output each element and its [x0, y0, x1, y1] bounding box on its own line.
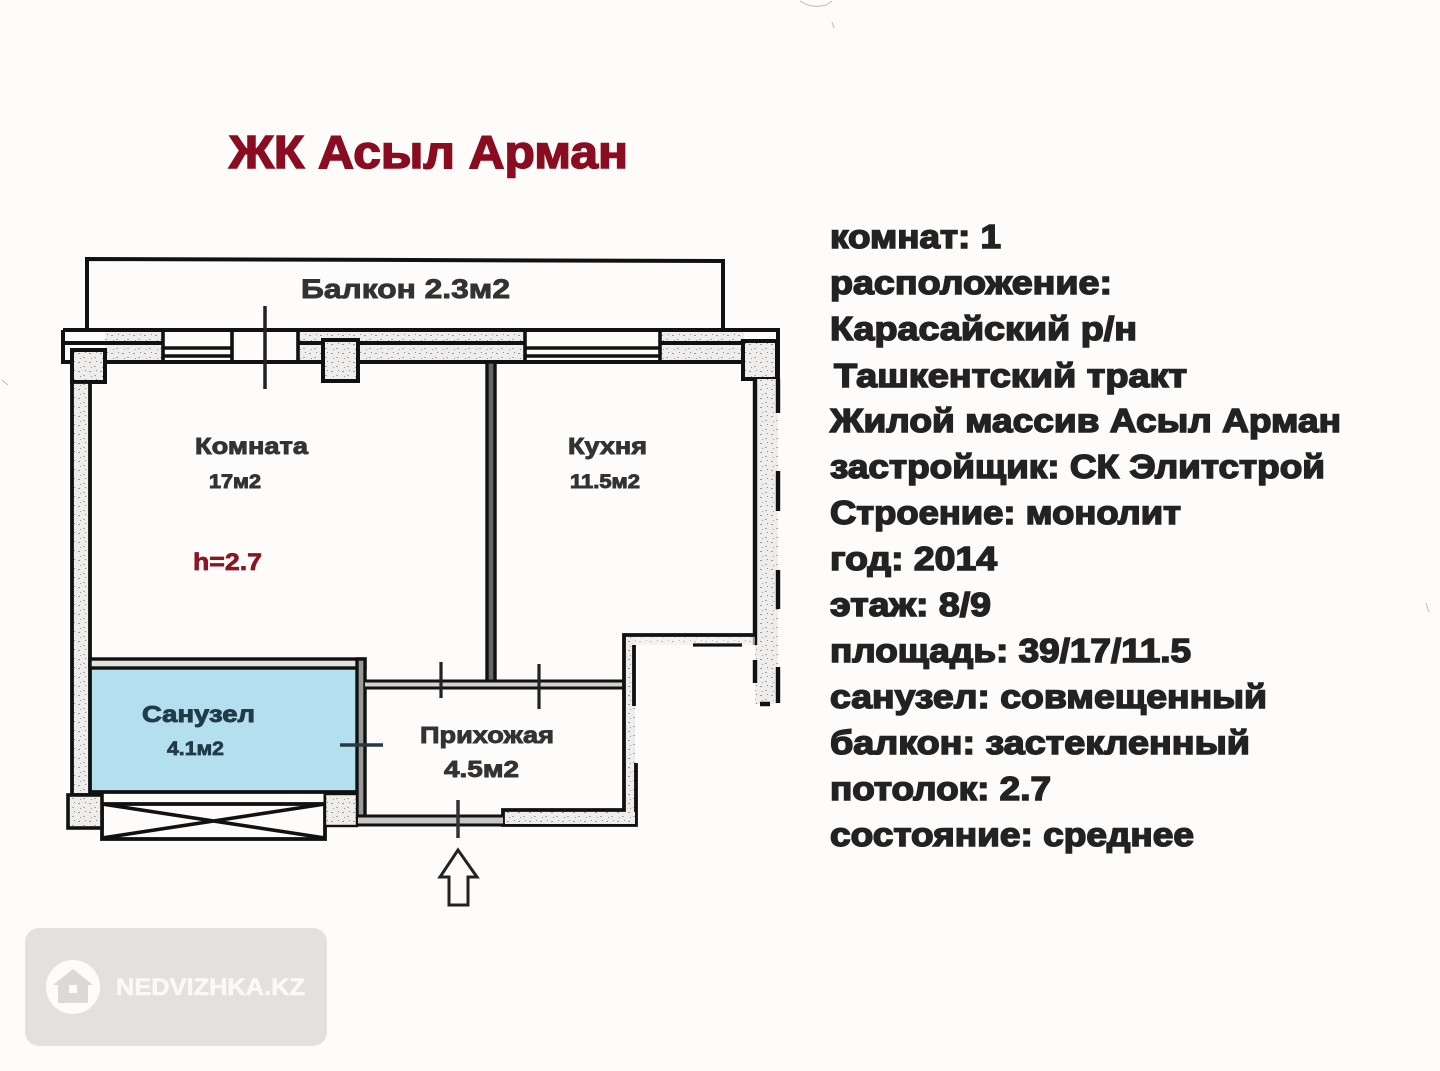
lower left column	[68, 795, 102, 828]
watermark text: NEDVIZHKA.KZ	[116, 974, 305, 1001]
arrow: entrance	[440, 850, 477, 905]
apartment details text block: расположение:	[830, 264, 1112, 301]
apartment details text block: год: 2014	[830, 540, 998, 577]
label: bathroom: Санузел	[142, 701, 255, 727]
lower right column	[325, 794, 357, 826]
room: bathroom fill	[91, 668, 357, 791]
apartment details text block: балкон: застекленный	[830, 724, 1250, 761]
title: ЖК Асыл Арман	[228, 126, 628, 178]
watermark badge	[25, 928, 327, 1046]
apartment details text block	[829, 218, 1341, 853]
label: ceiling height: h=2.7	[193, 549, 262, 576]
label: kitchen: Кухня	[568, 433, 647, 459]
floor plan	[63, 259, 778, 905]
label: hall area: 4.5м2	[444, 756, 519, 782]
left corner column	[72, 350, 105, 382]
middle column	[323, 340, 358, 381]
hall right wall and recess	[503, 635, 755, 825]
hall bottom wall with door	[358, 800, 503, 838]
top exterior wall	[63, 330, 778, 413]
partition between room and kitchen	[487, 362, 495, 682]
left wall	[72, 382, 90, 795]
apartment details text block: Карасайский р/н	[830, 310, 1137, 347]
apartment details text block: Ташкентский тракт	[834, 357, 1187, 394]
apartment details text block: Жилой массив Асыл Арман	[829, 402, 1341, 439]
window and door marks	[263, 306, 267, 389]
apartment details text block: состояние: среднее	[830, 816, 1194, 853]
label: room area: 17м2	[209, 472, 261, 493]
apartment details text block: Строение: монолит	[830, 494, 1181, 531]
apartment details text block: потолок: 2.7	[830, 770, 1051, 807]
right corner column	[743, 341, 777, 379]
apartment details text block: площадь: 39/17/11.5	[830, 632, 1191, 669]
label: balcony: Балкон 2.3м2	[301, 274, 510, 304]
apartment details text block: комнат: 1	[830, 218, 1001, 255]
hall top wall	[365, 662, 624, 709]
label: hall: Прихожая	[420, 722, 554, 748]
icon: house logo	[46, 960, 100, 1014]
apartment details text block: застройщик: СК Элитстрой	[830, 448, 1325, 485]
label: bathroom area: 4.1м2	[167, 739, 224, 760]
bathroom walls	[90, 659, 383, 824]
apartment details text block: санузел: совмещенный	[830, 678, 1267, 715]
apartment details text block: этаж: 8/9	[830, 586, 991, 623]
balcony outline	[87, 259, 723, 332]
label: kitchen area: 11.5м2	[570, 472, 640, 493]
right wall	[755, 379, 778, 704]
label: room: Комната	[195, 433, 308, 459]
ventilation shaft	[102, 793, 325, 839]
